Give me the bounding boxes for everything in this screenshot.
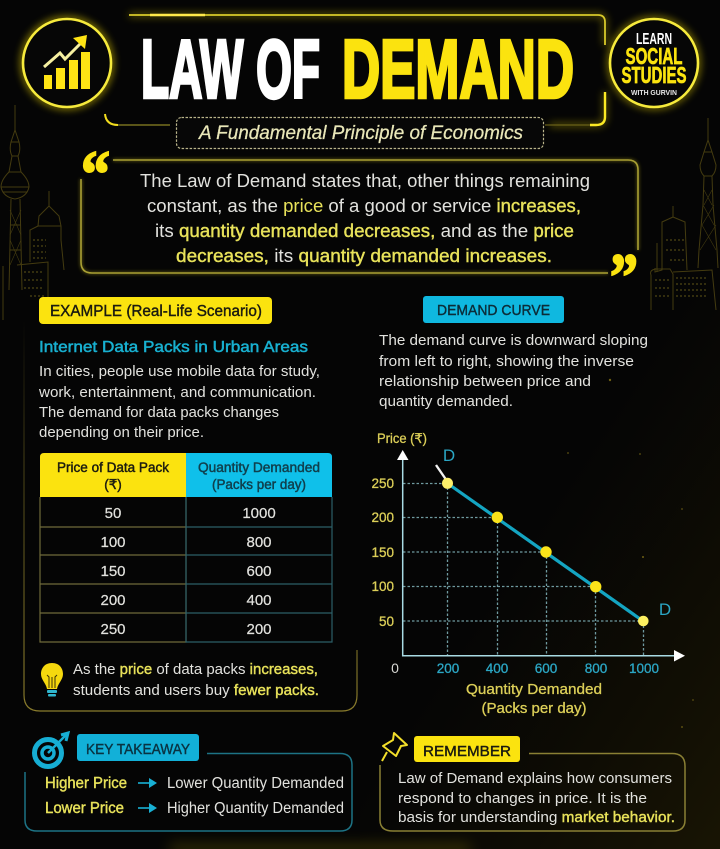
example description: In cities, people use mobile data for study, — [39, 363, 320, 380]
remember badge — [414, 736, 520, 762]
data points — [442, 478, 649, 626]
chart grid — [403, 483, 644, 655]
data table: Quantity Demanded — [198, 460, 320, 475]
example conclusion: As the price of data packs increases, — [73, 661, 318, 678]
demand curve description: relationship between price and — [379, 373, 591, 390]
axis labels: Price (₹) — [377, 431, 427, 446]
example heading: Internet Data Packs in Urban Areas — [39, 339, 308, 356]
example description: The demand for data packs changes — [39, 404, 279, 421]
title frame — [105, 15, 605, 125]
example conclusion — [73, 661, 319, 699]
demand curve description: quantity demanded. — [379, 393, 513, 410]
title: LAW OF — [141, 22, 320, 116]
takeaway row 2: Lower Price — [45, 800, 124, 817]
remember text: respond to changes in price. It is the — [398, 790, 647, 807]
data table: (₹) — [104, 477, 122, 492]
title: DEMAND — [342, 22, 574, 116]
demand curve description — [379, 332, 648, 410]
example badge — [39, 297, 272, 324]
panel: example — [24, 297, 357, 711]
axis labels: 400 — [486, 661, 508, 676]
data table: 50 — [105, 505, 121, 522]
logo: law of demand chart icon — [23, 19, 111, 107]
data table: 200 — [246, 621, 272, 638]
example conclusion: students and users buy fewer packs. — [73, 682, 319, 699]
definition panel — [81, 138, 638, 314]
remember text: basis for understanding market behavior. — [398, 809, 675, 826]
axis labels: D — [443, 446, 455, 465]
takeaway row 1 — [45, 775, 344, 792]
remember badge: REMEMBER — [423, 743, 511, 760]
axis labels: 800 — [585, 661, 607, 676]
data table — [40, 453, 332, 642]
demand curve description: The demand curve is downward sloping — [379, 332, 648, 349]
data table: 600 — [246, 563, 272, 580]
axis labels: 600 — [535, 661, 557, 676]
definition text — [140, 170, 590, 266]
definition text: The Law of Demand states that, other things remaining — [140, 170, 590, 191]
chart: demand curve — [371, 431, 685, 717]
icon: push pin — [382, 733, 407, 761]
icon: target — [34, 733, 68, 766]
axis labels: 1000 — [629, 661, 659, 676]
subtitle — [176, 118, 544, 148]
data table: 800 — [246, 534, 272, 551]
demand curve description: from left to right, showing the inverse — [379, 353, 634, 370]
demand curve badge — [423, 296, 564, 323]
data table: 150 — [100, 563, 126, 580]
data table: Price of Data Pack — [57, 460, 169, 475]
closing quote mark: ” — [610, 241, 638, 314]
definition text: its quantity demanded decreases, and as the price — [155, 220, 574, 241]
axis labels: 50 — [379, 614, 394, 629]
remember text: Law of Demand explains how consumers — [398, 770, 672, 787]
panel: key takeaway — [25, 733, 352, 831]
panel: remember — [380, 733, 685, 831]
icon: light bulb — [41, 663, 63, 696]
logo: learn social studies: LEARN — [636, 31, 672, 48]
skyline: left city — [1, 105, 64, 320]
data table: 100 — [100, 534, 126, 551]
takeaway row 1: Lower Quantity Demanded — [167, 775, 344, 792]
axis labels: D — [659, 600, 671, 619]
example badge: EXAMPLE (Real-Life Scenario) — [50, 303, 262, 320]
opening quote mark: “ — [81, 138, 110, 211]
axis labels: 200 — [371, 510, 394, 525]
logo: learn social studies — [610, 19, 698, 107]
axis labels: (Packs per day) — [482, 701, 586, 717]
axis labels: 0 — [391, 660, 399, 676]
chart axes — [397, 450, 685, 662]
skyline: right city — [651, 118, 718, 310]
definition text: constant, as the price of a good or service increases, — [147, 195, 581, 216]
key takeaway badge — [77, 734, 199, 761]
logo: learn social studies: WITH GURVIN — [631, 90, 677, 97]
definition text: decreases, its quantity demanded increases. — [176, 245, 552, 266]
data table: (Packs per day) — [212, 477, 306, 492]
takeaway row 1: Higher Price — [45, 775, 127, 792]
axis labels: 100 — [371, 579, 394, 594]
example description: work, entertainment, and communication. — [38, 384, 316, 401]
demand curve badge: DEMAND CURVE — [437, 302, 550, 319]
panel: demand curve text — [379, 296, 648, 410]
demand line — [436, 465, 643, 621]
data table: 1000 — [242, 505, 276, 522]
example description — [38, 363, 320, 441]
data table: 200 — [100, 592, 126, 609]
axis labels: 200 — [437, 661, 459, 676]
subtitle: A Fundamental Principle of Economics — [198, 123, 523, 144]
axis labels: Quantity Demanded — [466, 682, 602, 698]
logo: learn social studies: SOCIAL — [626, 43, 682, 69]
takeaway row 2: Higher Quantity Demanded — [167, 800, 344, 817]
axis labels: 250 — [371, 476, 394, 491]
remember text — [398, 770, 675, 826]
key takeaway badge: KEY TAKEAWAY — [86, 741, 190, 758]
data table: 400 — [246, 592, 272, 609]
logo: learn social studies: STUDIES — [622, 62, 686, 88]
takeaway row 2 — [45, 800, 344, 817]
example description: depending on their price. — [39, 424, 204, 441]
data table: 250 — [100, 621, 126, 638]
axis labels: 150 — [371, 545, 394, 560]
axis labels — [371, 431, 671, 717]
